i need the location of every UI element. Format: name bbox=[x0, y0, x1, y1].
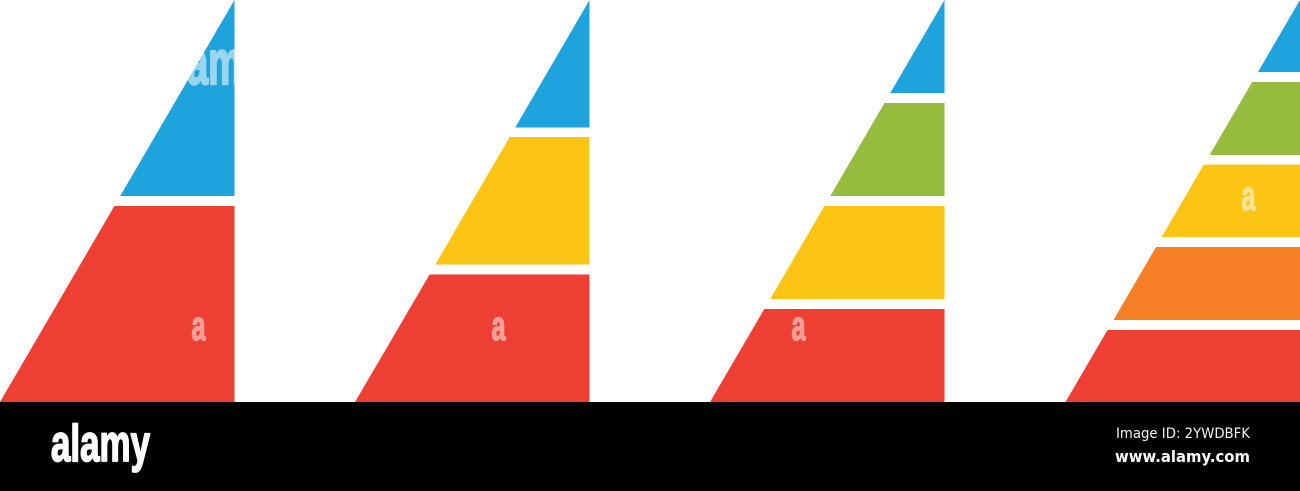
level: red base: a bbox=[792, 302, 806, 349]
level: red base bbox=[710, 302, 944, 402]
footer bar bbox=[0, 402, 1300, 491]
level: red base: a bbox=[492, 302, 506, 349]
pyramid 3: four levels bbox=[710, 0, 944, 402]
level: blue top: am bbox=[187, 29, 242, 98]
level: yellow middle bbox=[435, 137, 590, 264]
alamy logo: alamy bbox=[51, 415, 150, 473]
pyramid 2: three levels bbox=[355, 0, 590, 402]
level: yellow: a bbox=[1242, 172, 1256, 219]
level: red base bbox=[0, 206, 234, 402]
level: red base bbox=[355, 274, 590, 402]
level: green bbox=[830, 103, 944, 196]
level: red base: a bbox=[192, 302, 206, 349]
level: red base bbox=[1066, 330, 1300, 402]
level: blue top bbox=[120, 0, 242, 196]
level: blue top bbox=[890, 0, 944, 93]
pyramid 4: five levels bbox=[1066, 0, 1300, 402]
level: yellow bbox=[1162, 164, 1300, 237]
level: green bbox=[1210, 82, 1300, 155]
website url: www.alamy.com bbox=[1115, 447, 1250, 466]
image id: Image ID: 2YWDBFK bbox=[1116, 426, 1250, 442]
level: blue top bbox=[1258, 0, 1300, 72]
level: yellow bbox=[770, 206, 944, 299]
level: blue top bbox=[515, 0, 590, 128]
level: orange bbox=[1114, 247, 1300, 320]
pyramid 1: two levels bbox=[0, 0, 242, 402]
